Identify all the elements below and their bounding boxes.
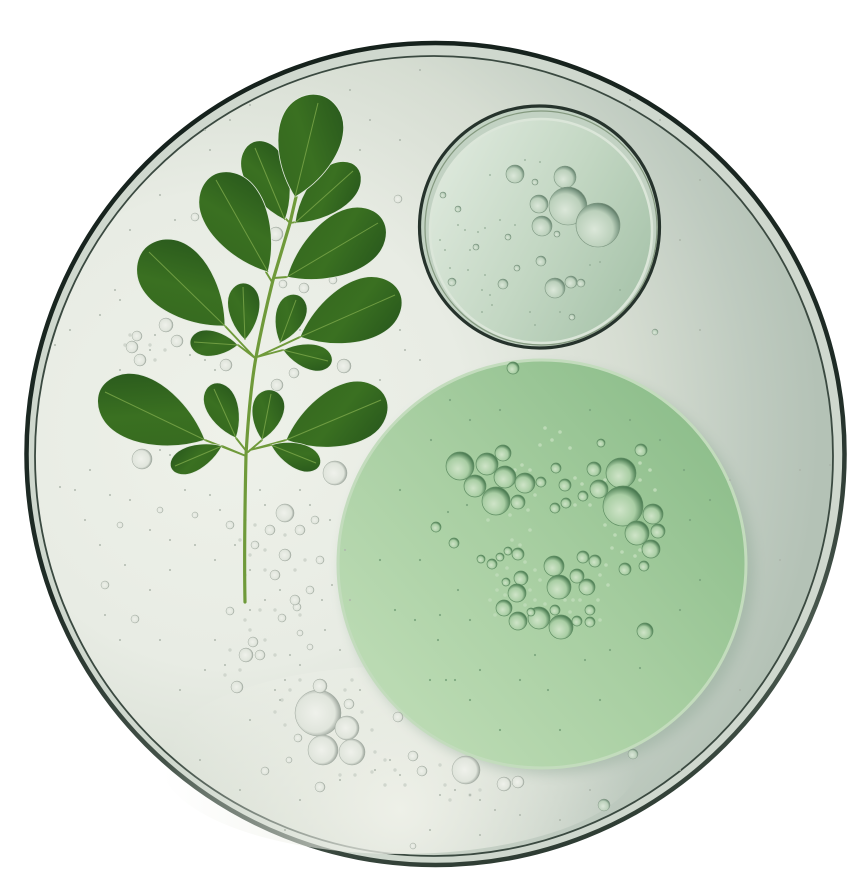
leaf midribs bbox=[105, 103, 395, 466]
small glass dish bbox=[420, 106, 660, 348]
floor specks bbox=[55, 70, 830, 835]
white bubbles on dish floor bbox=[101, 195, 524, 849]
stem and petioles bbox=[205, 197, 300, 602]
bottom highlight bbox=[160, 666, 640, 854]
large green serum pool bbox=[338, 360, 754, 774]
leaflets bbox=[86, 87, 412, 480]
small dish bubbles bbox=[440, 165, 620, 320]
serum specks bbox=[380, 400, 710, 730]
leaf sprig bbox=[86, 87, 412, 602]
grey bubbles on the shaded side bbox=[598, 329, 658, 811]
small dish specks bbox=[440, 160, 620, 325]
serum froth bbox=[488, 428, 655, 620]
serum bubbles bbox=[431, 362, 665, 639]
floor froth bbox=[125, 335, 480, 800]
